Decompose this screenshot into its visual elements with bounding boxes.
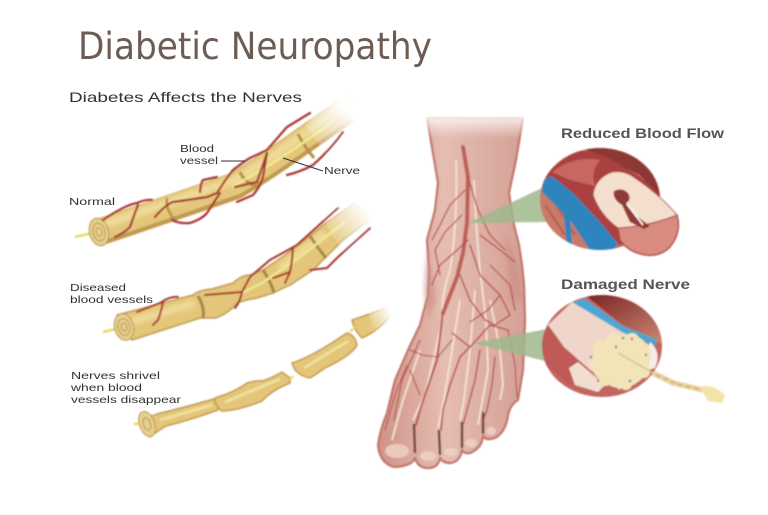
frayed nerve fibre xyxy=(618,353,653,373)
nerve segments xyxy=(140,308,392,437)
label: nerves shrivel: vessels disappear xyxy=(71,394,182,406)
label: nerve: Nerve xyxy=(324,165,360,177)
label: normal: Normal xyxy=(69,196,115,208)
arteries xyxy=(385,147,517,430)
label: nerve xyxy=(283,158,360,177)
magnified circle xyxy=(542,295,662,397)
ankle shading xyxy=(424,250,436,320)
label: diseased blood vessels xyxy=(70,282,153,306)
artery wall xyxy=(544,150,660,245)
label: diseased blood vessels: Diseased xyxy=(70,282,126,294)
green cone xyxy=(473,329,547,361)
heading: diabetes affects the nerves: Diabetes Affects the Nerves xyxy=(69,89,302,105)
narrowed lumen xyxy=(614,189,650,229)
label: blood vessel: vessel xyxy=(180,155,218,167)
dark tissue xyxy=(585,295,665,345)
illustration: foot xyxy=(378,112,530,468)
toenails xyxy=(385,427,496,461)
toe gaps xyxy=(414,413,483,454)
nerves: pale lines xyxy=(392,160,503,440)
dark upper tissue xyxy=(585,147,660,196)
label: blood vessel: Blood xyxy=(180,143,214,155)
callout: damaged nerve xyxy=(473,295,725,403)
nerve sheath xyxy=(117,203,372,340)
label: diseased blood vessels: blood vessels xyxy=(70,294,153,306)
muscle tissue xyxy=(540,192,588,248)
foot silhouette xyxy=(378,118,525,468)
label: blood vessel xyxy=(180,143,245,167)
blue vein xyxy=(572,299,658,345)
red muscle xyxy=(542,326,590,384)
yellow nerve core xyxy=(103,327,124,332)
illustration: shrivelled nerve xyxy=(134,296,398,439)
green cone xyxy=(468,187,546,223)
title: Diabetic Neuropathy xyxy=(78,25,432,68)
callout: reduced blood flow xyxy=(468,145,678,255)
label: nerves shrivel: when blood xyxy=(70,382,142,394)
pale nerve sheath xyxy=(548,302,650,390)
nerve sheath xyxy=(100,102,350,232)
artery cross-section: inner wall xyxy=(593,172,677,228)
label: damaged nerve: Damaged Nerve xyxy=(561,276,690,292)
blood vessels xyxy=(137,208,370,325)
blood vessels xyxy=(103,113,343,237)
fade at ankle top xyxy=(418,112,530,138)
artery cross-section: lower wall xyxy=(618,215,678,255)
illustration: normal nerve xyxy=(75,90,372,248)
blue vein xyxy=(542,176,618,250)
label: nerves shrivel xyxy=(70,370,182,406)
label: reduced blood flow: Reduced Blood Flow xyxy=(561,125,724,141)
illustration: diseased nerve xyxy=(103,185,385,342)
magnified circle xyxy=(540,148,660,250)
yellow nerve core xyxy=(75,232,97,237)
nerve bundle cross-section xyxy=(589,333,651,390)
label: nerves shrivel: Nerves shrivel xyxy=(71,370,160,382)
